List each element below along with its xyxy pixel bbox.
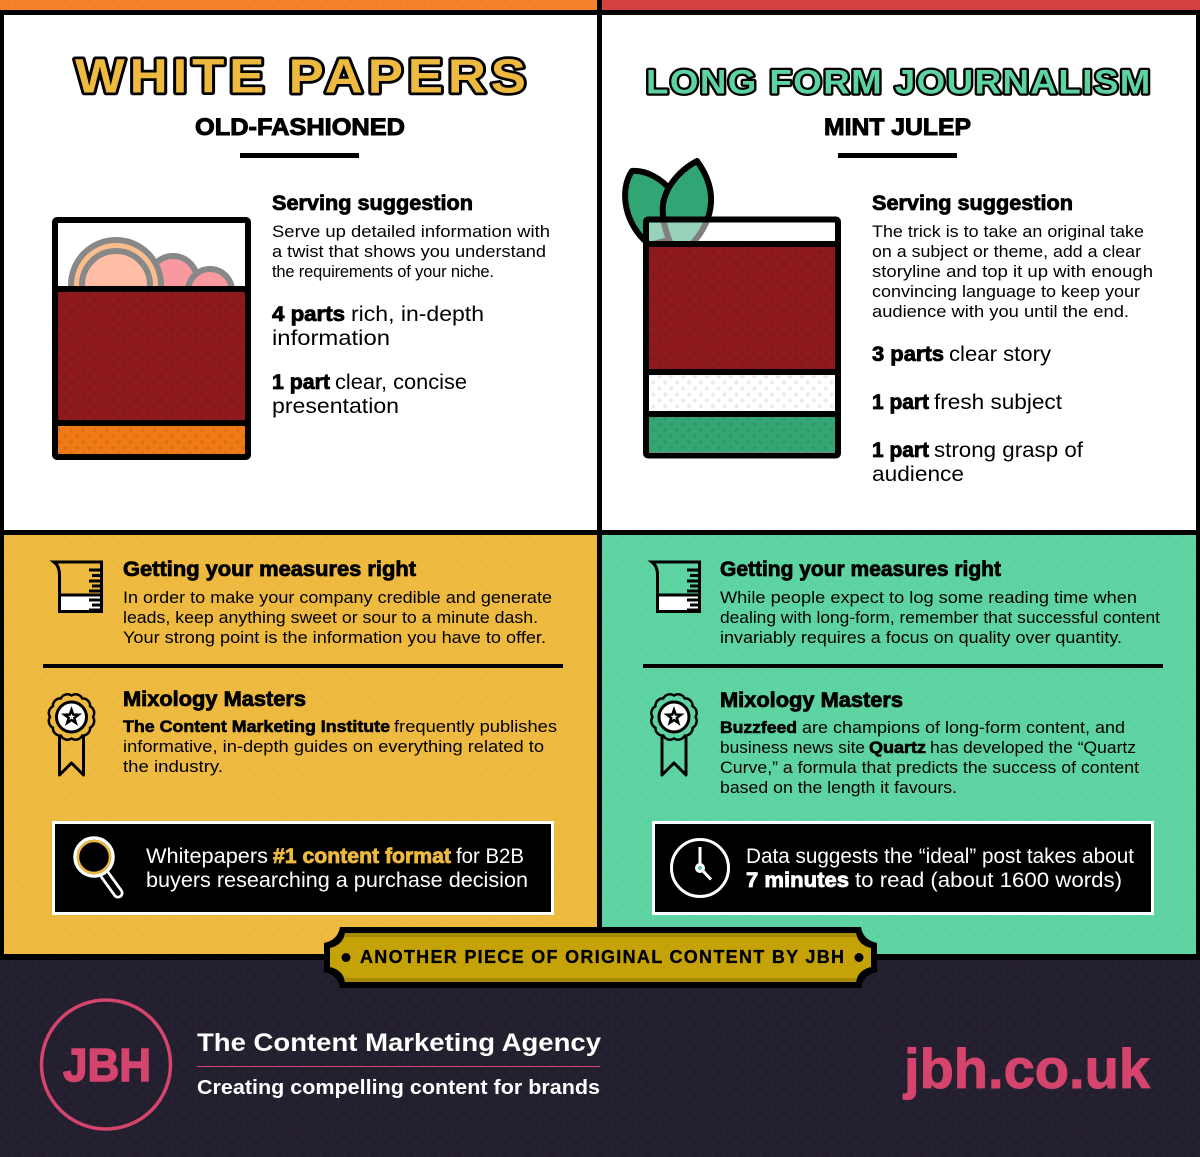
text: getting your measures right	[123, 558, 552, 647]
icon: award rosette	[651, 694, 697, 775]
text: mixology masters	[123, 688, 557, 776]
callout: ideal post length	[654, 822, 1152, 914]
agency strapline: The Content Marketing Agency	[197, 1029, 601, 1057]
text: getting your measures right: While people expect to log some reading time when	[720, 589, 1137, 607]
text: getting your measures right: dealing with long-form, remember that successful content	[720, 609, 1160, 627]
callout text	[746, 845, 1134, 892]
text: serving suggestion: storyline and top it up with enough	[872, 263, 1153, 281]
agency strapline	[197, 1029, 601, 1099]
text: recipe parts: strong grasp of	[934, 439, 1083, 462]
callout text: to read (about 1600 words)	[855, 869, 1122, 892]
subtitle: mint julep: MINT JULEP	[824, 114, 971, 141]
icon: magnifying glass	[75, 838, 118, 893]
agency strapline: Creating compelling content for brands	[197, 1077, 600, 1099]
callout text: Data suggests the “ideal” post takes about	[746, 845, 1134, 868]
icon: mint julep glass	[625, 161, 838, 456]
text: serving suggestion: The trick is to take an original take	[872, 223, 1144, 241]
text: mixology masters: the industry.	[123, 758, 223, 776]
text: recipe parts: information	[272, 327, 390, 350]
text: mixology masters: Mixology Masters	[123, 688, 306, 711]
text: mixology masters: Buzzfeed	[720, 719, 797, 737]
icon: measuring beaker	[652, 562, 700, 612]
text: recipe parts: 1 part	[272, 371, 330, 394]
text: serving suggestion: Serving suggestion	[272, 192, 473, 215]
text: mixology masters: informative, in-depth guides on everything related to	[123, 738, 544, 756]
text: serving suggestion: Serve up detailed information with	[272, 223, 550, 241]
callout: number one content format	[54, 822, 552, 914]
text: serving suggestion: on a subject or theme, add a clear	[872, 243, 1142, 261]
text: recipe parts: audience	[872, 463, 964, 486]
panel: long form tips	[602, 535, 1196, 954]
text: mixology masters: business news site	[720, 739, 865, 757]
text: serving suggestion: audience with you until the end.	[872, 303, 1129, 321]
text: getting your measures right: invariably requires a focus on quality over quantity.	[720, 629, 1122, 647]
text: getting your measures right: In order to make your company credible and generate	[123, 589, 552, 607]
text: getting your measures right: Getting your measures right	[720, 558, 1001, 581]
divider	[643, 664, 1163, 668]
text: getting your measures right: leads, keep anything sweet or sour to a minute dash.	[123, 609, 538, 627]
callout text: for B2B	[456, 845, 524, 868]
text: mixology masters: Curve,” a formula that predicts the success of content	[720, 759, 1139, 777]
logo: JBH circle: JBH	[63, 1039, 151, 1091]
callout text: buyers researching a purchase decision	[146, 869, 528, 892]
text: serving suggestion: a twist that shows you understand	[272, 243, 546, 261]
panel: white papers	[4, 15, 597, 530]
text: recipe parts: 4 parts	[272, 303, 345, 326]
text: mixology masters: Mixology Masters	[720, 689, 903, 712]
subtitle: old-fashioned: OLD-FASHIONED	[195, 114, 405, 141]
heading rule	[240, 153, 359, 158]
text: getting your measures right: Getting your measures right	[123, 558, 416, 581]
icon: measuring beaker	[54, 562, 102, 612]
text: recipe parts: clear, concise	[335, 371, 467, 394]
callout text	[146, 845, 528, 892]
text: recipe parts	[872, 343, 1083, 486]
text: serving suggestion	[272, 192, 550, 281]
text: mixology masters: frequently publishes	[394, 718, 557, 736]
text: mixology masters: Quartz	[869, 739, 926, 757]
text: serving suggestion: Serving suggestion	[872, 192, 1073, 215]
callout text: 7 minutes	[746, 869, 849, 892]
text: serving suggestion: the requirements of your niche.	[272, 263, 494, 281]
panel: white papers tips	[4, 535, 597, 954]
footer	[0, 960, 1200, 1157]
text: serving suggestion	[872, 192, 1153, 321]
website url: jbh.co.uk	[903, 1037, 1151, 1100]
text: serving suggestion: convincing language to keep your	[872, 283, 1141, 301]
text: recipe parts: 1 part	[872, 439, 929, 462]
text: getting your measures right	[720, 558, 1160, 647]
logo: JBH circle	[42, 1000, 170, 1129]
text: recipe parts: presentation	[272, 395, 399, 418]
text: mixology masters: are champions of long-form content, and	[802, 719, 1125, 737]
text: recipe parts: fresh subject	[934, 391, 1062, 414]
text: recipe parts: rich, in-depth	[351, 303, 484, 326]
top bar: red	[602, 0, 1200, 10]
text: recipe parts: 3 parts	[872, 343, 944, 366]
text: getting your measures right: Your strong point is the information you have to offer.	[123, 629, 546, 647]
banner: another piece of original content: ANOTHER PIECE OF ORIGINAL CONTENT BY JBH	[360, 947, 844, 967]
title: white papers: WHITE PAPERS	[75, 49, 526, 103]
banner: another piece of original content	[324, 927, 877, 988]
callout text: Whitepapers	[146, 845, 268, 868]
text: recipe parts: clear story	[949, 343, 1052, 366]
text: recipe parts	[272, 303, 484, 418]
text: mixology masters	[720, 689, 1139, 797]
heading rule	[838, 153, 957, 158]
callout text: #1 content format	[273, 845, 451, 868]
text: recipe parts: 1 part	[872, 391, 929, 414]
title: long form journalism: LONG FORM JOURNALISM	[646, 64, 1150, 101]
divider	[43, 664, 563, 668]
top bar: orange	[0, 0, 597, 10]
text: mixology masters: based on the length it favours.	[720, 779, 957, 797]
text: mixology masters: The Content Marketing Institute	[123, 718, 390, 736]
icon: award rosette	[49, 694, 94, 775]
icon: clock	[672, 840, 728, 896]
text: mixology masters: has developed the “Quartz	[930, 739, 1136, 757]
icon: old-fashioned glass	[55, 220, 248, 457]
panel: long form journalism	[602, 15, 1196, 530]
